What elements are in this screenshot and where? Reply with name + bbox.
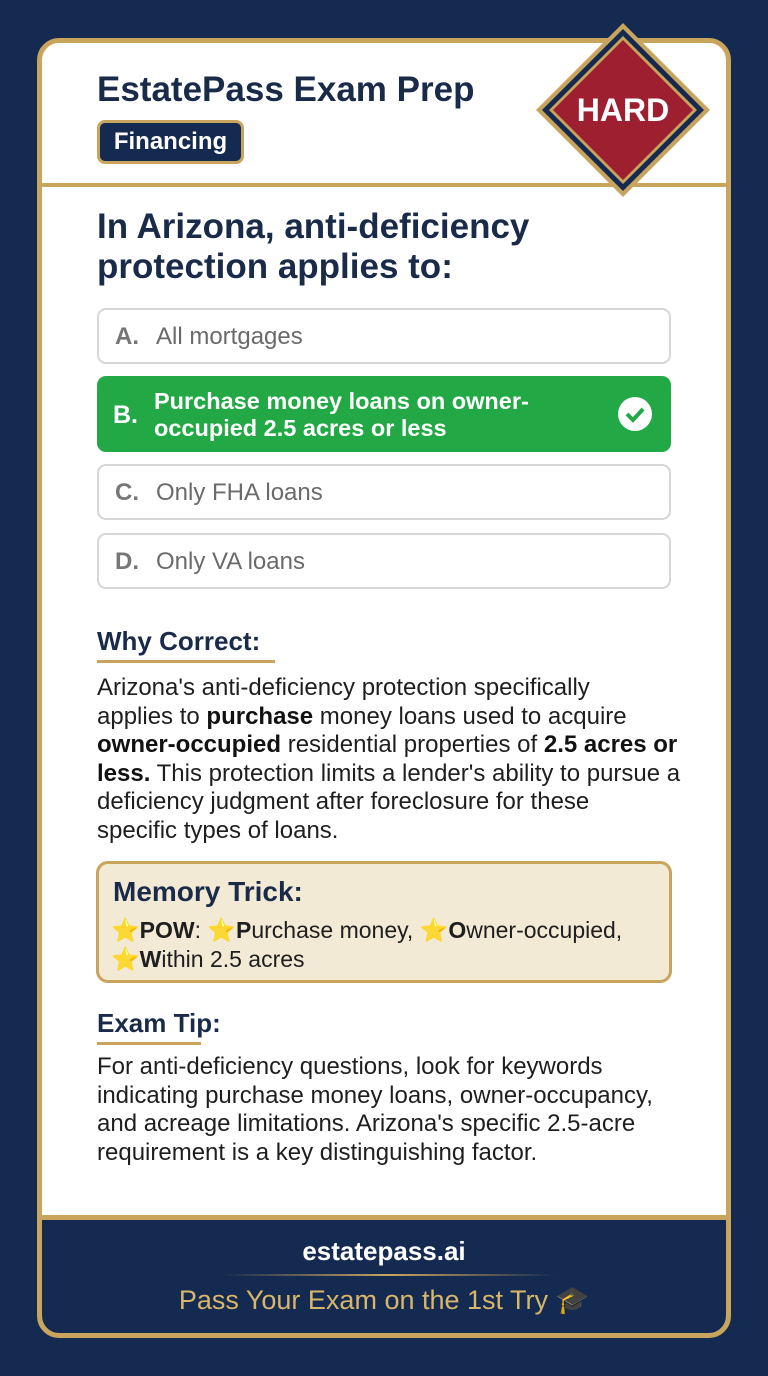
question — [97, 207, 530, 286]
tagline: Pass Your Exam on the 1st Try 🎓 — [179, 1285, 589, 1315]
exam tip text: and acreage limitations. Arizona's specific 2.5-acre — [97, 1110, 635, 1137]
exam tip text — [97, 1053, 653, 1166]
title: EstatePass Exam Prep — [97, 70, 474, 109]
option B correct: occupied 2.5 acres or less — [154, 415, 447, 441]
option D — [97, 533, 671, 589]
explanation: owner-occupied residential properties of 2.5 acres or — [97, 731, 677, 758]
footer url: estatepass.ai — [302, 1236, 466, 1266]
option B correct — [97, 376, 671, 452]
explanation: Arizona's anti-deficiency protection specifically — [97, 674, 590, 701]
option A: All mortgages — [156, 323, 303, 350]
explanation: deficiency judgment after foreclosure for these — [97, 788, 589, 815]
option A: A. — [115, 323, 139, 350]
badge: Financing: Financing — [114, 128, 227, 155]
exam tip text: For anti-deficiency questions, look for keywords — [97, 1053, 603, 1080]
option B correct: B. — [113, 401, 138, 429]
explanation: less. This protection limits a lender's ability to pursue a — [97, 760, 680, 786]
option C: Only FHA loans — [156, 479, 323, 506]
memory text: ⭐POW: ⭐Purchase money, ⭐Owner-occupied, — [111, 917, 622, 943]
explanation: applies to purchase money loans used to acquire — [97, 702, 627, 730]
option C — [97, 464, 671, 520]
option D: D. — [115, 548, 139, 575]
option A — [97, 308, 671, 364]
heading: why correct: Why Correct: — [97, 626, 260, 656]
explanation: specific types of loans. — [97, 816, 338, 844]
question: protection applies to: — [97, 247, 453, 286]
memory text: ⭐Within 2.5 acres — [111, 946, 305, 972]
heading: exam tip: Exam Tip: — [97, 1008, 221, 1038]
option C: C. — [115, 479, 139, 506]
option D: Only VA loans — [156, 548, 305, 575]
question: In Arizona, anti-deficiency — [97, 207, 529, 246]
icon: check — [618, 397, 652, 431]
badge: HARD diamond: HARD — [577, 92, 669, 128]
header divider — [42, 183, 726, 187]
memory title: Memory Trick: — [113, 876, 303, 907]
explanation — [97, 674, 680, 844]
memory trick box — [96, 861, 672, 983]
badge: Financing — [97, 120, 244, 164]
option B correct: Purchase money loans on owner- — [154, 388, 529, 414]
footer — [42, 1215, 726, 1343]
exam tip text: indicating purchase money loans, owner-occupancy, — [97, 1082, 653, 1108]
memory text — [111, 917, 622, 972]
exam tip text: requirement is a key distinguishing factor. — [97, 1138, 537, 1166]
badge: HARD diamond — [536, 23, 710, 197]
